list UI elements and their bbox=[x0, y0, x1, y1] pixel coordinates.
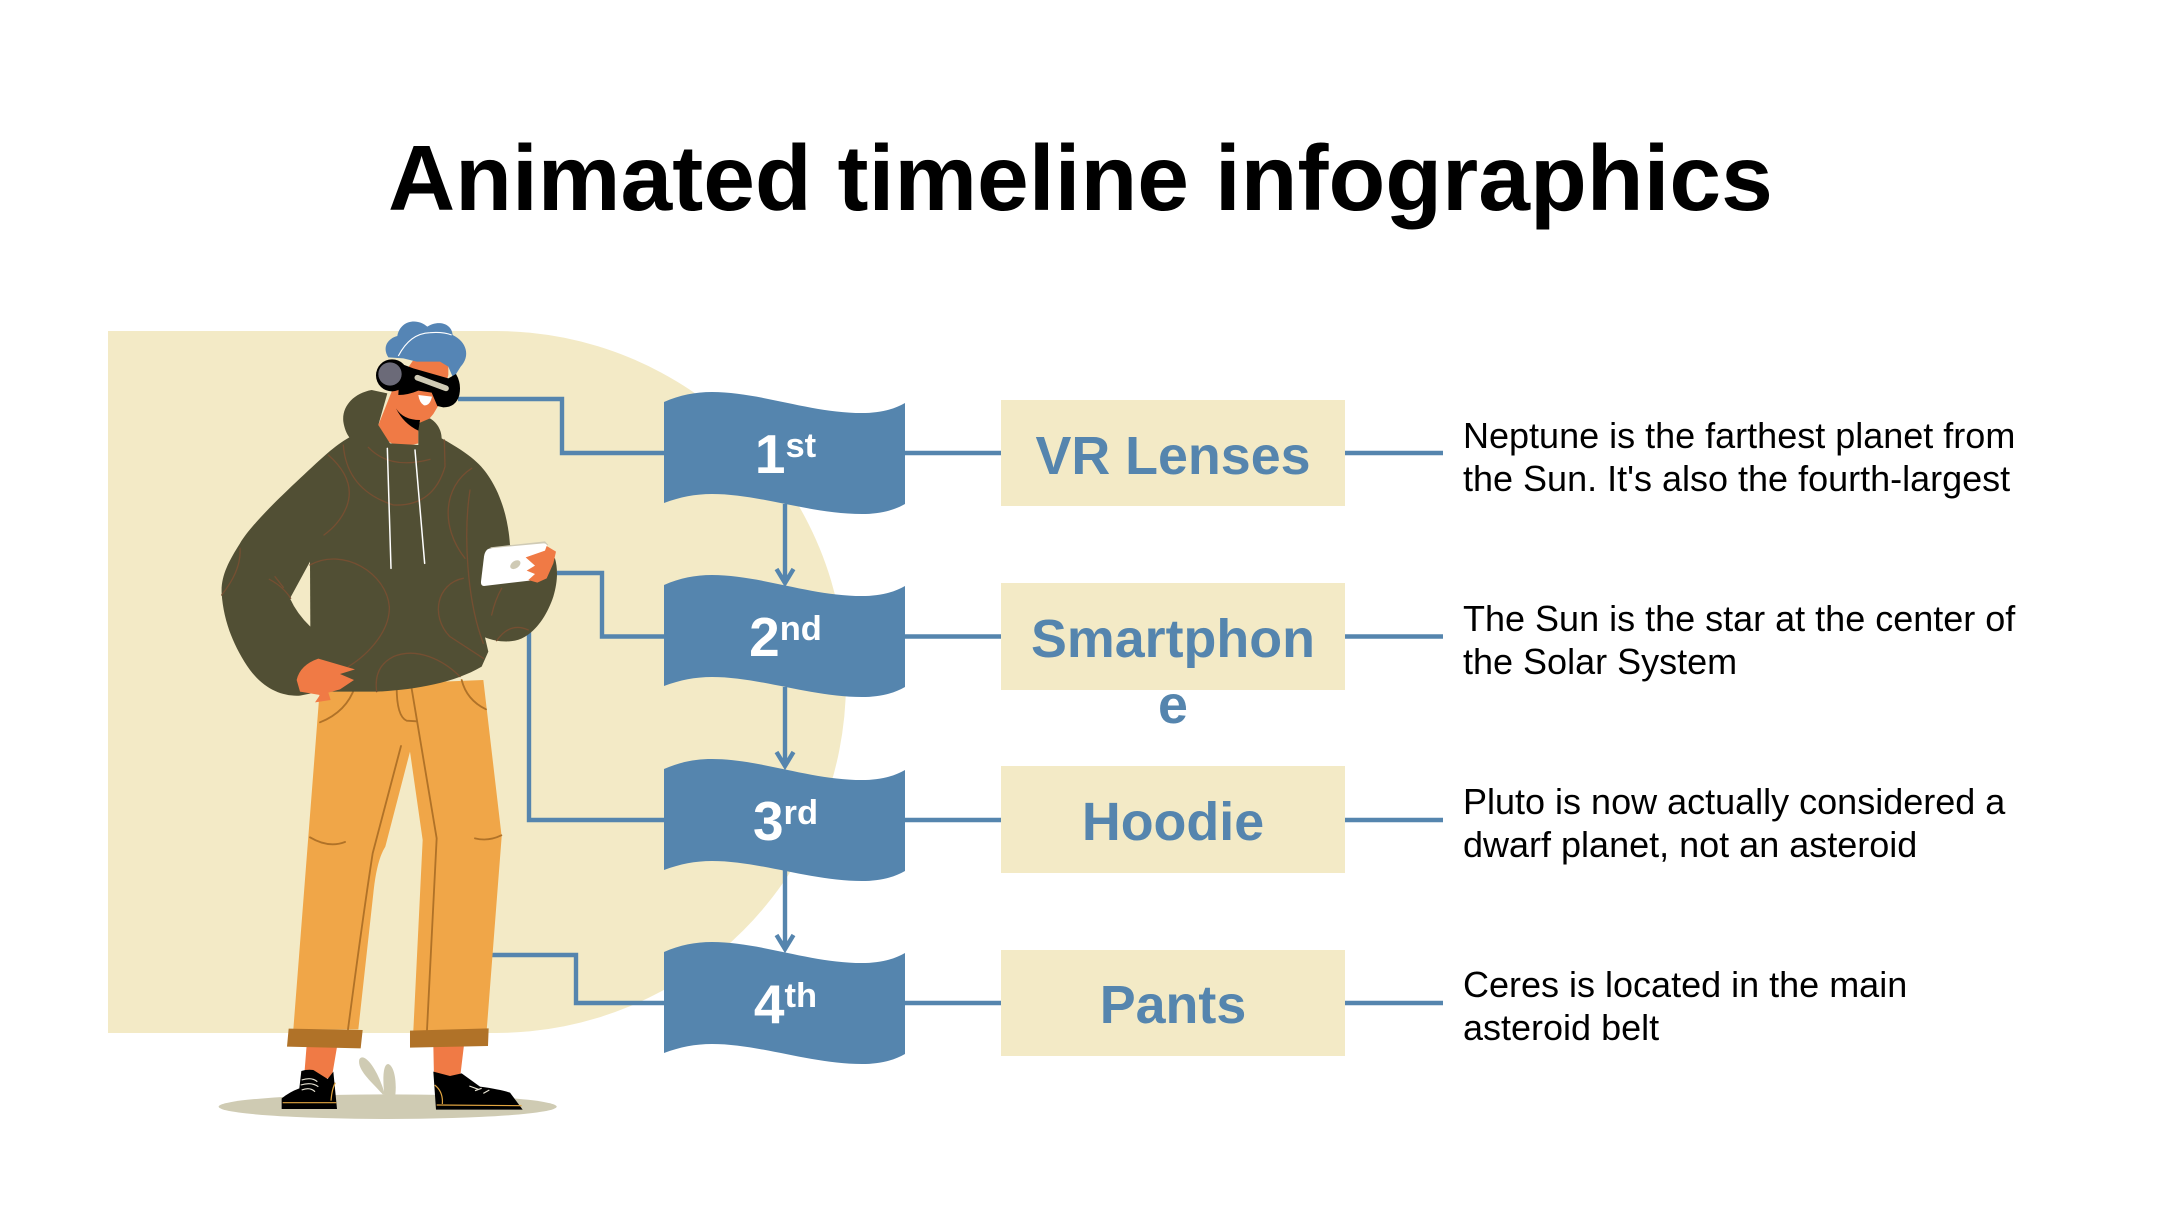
row 1 bbox=[664, 392, 2015, 514]
description 1: the Sun. It's also the fourth-largest bbox=[1463, 458, 2010, 499]
description 2: The Sun is the star at the center of bbox=[1463, 598, 2015, 639]
description 1: Neptune is the farthest planet from bbox=[1463, 415, 2015, 456]
plant bbox=[359, 1057, 396, 1095]
label box 4 bbox=[1001, 950, 1345, 1056]
right shoe bbox=[433, 1072, 523, 1110]
pants seams bbox=[310, 680, 501, 1030]
label 1: VR Lenses bbox=[1035, 426, 1311, 486]
illustration: person with VR headset bbox=[219, 321, 557, 1119]
upper body bbox=[222, 321, 557, 702]
flag 4 text: 4 bbox=[754, 973, 785, 1035]
left hand bbox=[297, 659, 355, 702]
row 2 bbox=[664, 575, 2016, 735]
flag 4 bbox=[664, 942, 905, 1064]
flag 1 bbox=[664, 392, 905, 514]
flag 3 text: rd bbox=[784, 794, 818, 832]
flag 2 text: 2 bbox=[749, 606, 780, 668]
description 4: asteroid belt bbox=[1463, 1007, 1659, 1048]
label box 1 bbox=[1001, 400, 1345, 506]
flag 1 text: 1 bbox=[755, 423, 785, 485]
background cream shape bbox=[108, 331, 846, 1033]
gap between arm and torso bbox=[290, 562, 310, 627]
label 2: Smartphon bbox=[1031, 609, 1315, 669]
ground shadow bbox=[219, 1094, 557, 1119]
beard bbox=[396, 408, 420, 431]
flag 2 text: nd bbox=[780, 610, 822, 648]
connector lines bbox=[458, 399, 1443, 1003]
hoodie bbox=[222, 390, 557, 696]
cuffs bbox=[287, 1028, 489, 1048]
flag 4 text: th bbox=[785, 977, 817, 1015]
label 4: Pants bbox=[1100, 975, 1246, 1035]
flag 2 bbox=[664, 575, 905, 697]
pants bbox=[293, 680, 502, 1031]
ankles bbox=[304, 1045, 464, 1078]
label 2: e bbox=[1158, 675, 1188, 735]
lower body bbox=[219, 680, 557, 1119]
flag 1 text: st bbox=[785, 427, 817, 465]
phone bbox=[481, 541, 548, 586]
row 4 bbox=[664, 942, 1907, 1064]
VR headset bbox=[376, 359, 460, 407]
hair bbox=[386, 321, 466, 378]
label box 2 bbox=[1001, 583, 1345, 690]
right hand bbox=[526, 546, 556, 583]
description 2: the Solar System bbox=[1463, 641, 1737, 682]
arrows between flags bbox=[776, 504, 794, 949]
description 3: Pluto is now actually considered a bbox=[1463, 781, 2005, 822]
description 4: Ceres is located in the main bbox=[1463, 964, 1907, 1005]
hoodie creases bbox=[222, 440, 528, 692]
neck and face bbox=[378, 360, 448, 445]
smile bbox=[418, 395, 432, 405]
title: Animated timeline infographics bbox=[388, 126, 1773, 230]
description 3: dwarf planet, not an asteroid bbox=[1463, 824, 1917, 865]
flag 3 bbox=[664, 759, 905, 881]
label 3: Hoodie bbox=[1082, 792, 1264, 852]
label box 3 bbox=[1001, 766, 1345, 873]
row 3 bbox=[664, 759, 2006, 881]
left shoe bbox=[282, 1070, 337, 1109]
flag 3 text: 3 bbox=[753, 790, 784, 852]
hoodie strings bbox=[387, 448, 425, 568]
